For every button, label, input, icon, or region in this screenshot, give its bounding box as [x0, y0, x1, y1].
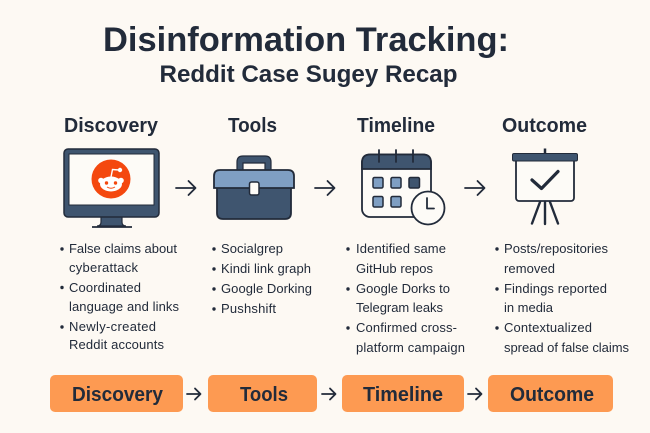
bullet list: Discovery: Reddit accounts: [69, 337, 164, 352]
bullet list: Discovery: [60, 241, 179, 352]
bullet list: Timeline: Identified same: [356, 241, 446, 256]
arrow: Tools to Timeline: [315, 181, 334, 195]
button: Discovery: Discovery: [72, 384, 164, 406]
arrow: Discovery to Tools: [176, 181, 196, 195]
button: Tools: [208, 375, 317, 412]
button: Timeline: [342, 375, 464, 412]
bullet list: Outcome: [495, 241, 630, 355]
bullet list: Tools: Pushshift: [221, 301, 276, 316]
heading: Timeline: Timeline: [357, 115, 435, 137]
title: Disinformation Tracking:: [103, 21, 509, 59]
icon: toolbox: [214, 156, 294, 219]
bullet list: Tools: [212, 241, 312, 316]
bullet list: Outcome: Contextualized: [504, 320, 592, 335]
arrow: Timeline to Outcome: [465, 181, 484, 195]
subtitle: Reddit Case Sugey Recap: [160, 61, 458, 88]
bullet list: Discovery: Newly-created: [69, 319, 156, 334]
bullet list: Timeline: platform campaign: [356, 340, 465, 355]
bullet list: Tools: Kindi link graph: [221, 261, 311, 276]
arrow: flow 2: [322, 388, 336, 400]
heading: Outcome: Outcome: [502, 115, 587, 137]
arrow: flow 1: [187, 388, 200, 400]
arrow: flow 3: [468, 388, 482, 400]
button: Discovery: [50, 375, 183, 412]
heading: Discovery: Discovery: [64, 115, 159, 137]
bullet list: Outcome: Findings reported: [504, 281, 607, 296]
bullet list: Outcome: removed: [504, 261, 555, 276]
bullet list: Timeline: GitHub repos: [356, 261, 434, 276]
bullet list: Discovery: False claims about: [69, 241, 177, 256]
bullet list: Outcome: spread of false claims: [504, 340, 630, 355]
bullet list: Discovery: Coordinated: [69, 280, 141, 295]
icon: monitor with Reddit logo: [64, 149, 159, 227]
icon: presentation board with checkmark: [512, 148, 578, 224]
icon: calendar with clock: [362, 150, 444, 224]
bullet list: Tools: Socialgrep: [221, 241, 283, 256]
bullet list: Timeline: Google Dorks to: [356, 281, 450, 296]
bullet list: Timeline: Confirmed cross-: [356, 320, 457, 335]
bullet list: Discovery: language and links: [69, 299, 180, 314]
button: Outcome: Outcome: [510, 384, 594, 406]
button: Outcome: [488, 375, 613, 412]
bullet list: Timeline: [346, 241, 465, 355]
bullet list: Tools: Google Dorking: [221, 281, 312, 296]
bullet list: Outcome: Posts/repositories: [504, 241, 608, 256]
bullet list: Discovery: cyberattack: [69, 260, 138, 275]
button: Timeline: Timeline: [363, 384, 443, 406]
heading: Tools: Tools: [228, 115, 277, 137]
bullet list: Outcome: in media: [504, 300, 554, 315]
bullet list: Timeline: Telegram leaks: [356, 300, 444, 315]
button: Tools: Tools: [240, 384, 288, 406]
